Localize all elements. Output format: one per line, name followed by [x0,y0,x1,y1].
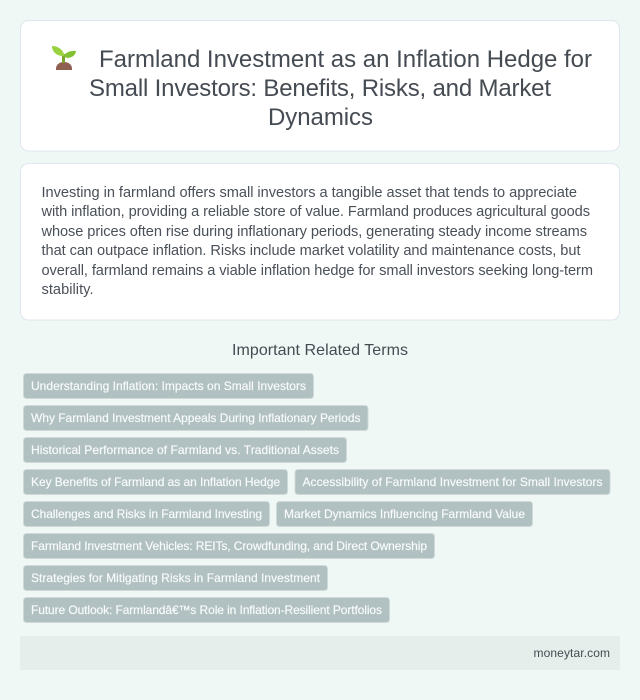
tag: historical performance: Historical Performance of Farmland vs. Traditional Assets [31,443,339,457]
panel: summary card [20,164,620,320]
text block: summary: stability. [42,282,94,298]
tag: investment vehicles: Farmland Investment Vehicles: REITs, Crowdfunding, and Direct Ownership [31,539,427,553]
tag: strategies [24,566,328,590]
heading: title: Farmland Investment as an Inflation Hedge for [99,46,592,73]
tag: key benefits: Key Benefits of Farmland as an Inflation Hedge [31,475,280,489]
heading: title: Small Investors: Benefits, Risks, and Market [89,75,551,102]
text block: summary: overall, farmland remains a viable inflation hedge for small investors seeking long-term [42,263,593,279]
text block: summary: with inflation, providing a reliable store of value. Farmland produces agricultural goods [40,204,590,220]
tag: market dynamics [276,502,532,526]
tag: market dynamics: Market Dynamics Influencing Farmland Value [284,507,525,521]
tag: understanding inflation [24,374,314,398]
tag: why farmland [24,406,368,430]
panel: title card [20,20,620,151]
tag: historical performance [24,438,346,462]
text block: summary [40,185,593,298]
footer: moneytar.com [534,646,610,660]
heading: title: Dynamics [268,104,373,131]
tag: understanding inflation: Understanding Inflation: Impacts on Small Investors [31,379,306,393]
text block: summary: that can outpace inflation. Risks include market volatility and maintenance costs, but [42,243,580,259]
text block: summary: Investing in farmland offers small investors a tangible asset that tends to appreciate [42,185,577,201]
tag: future outlook: Future Outlook: Farmlandâ€™s Role in Inflation-Resilient Portfolios [31,603,382,617]
tag: why farmland: Why Farmland Investment Appeals During Inflationary Periods [31,411,360,425]
heading: title [89,46,592,131]
tag: future outlook [24,598,390,622]
tag: key benefits [24,470,288,494]
tag: challenges and risks: Challenges and Risks in Farmland Investing [31,507,262,521]
tag: accessibility [295,470,610,494]
icon: seedling [52,46,76,70]
heading: related terms: Important Related Terms [232,342,408,359]
text block: summary: whose prices often rise during inflationary periods, generating steady income streams [40,224,587,240]
tag: strategies: Strategies for Mitigating Risks in Farmland Investment [31,571,321,585]
footer [20,636,620,670]
tag: investment vehicles [24,534,434,558]
tag: challenges and risks [24,502,270,526]
tag: accessibility: Accessibility of Farmland Investment for Small Investors [302,475,602,489]
